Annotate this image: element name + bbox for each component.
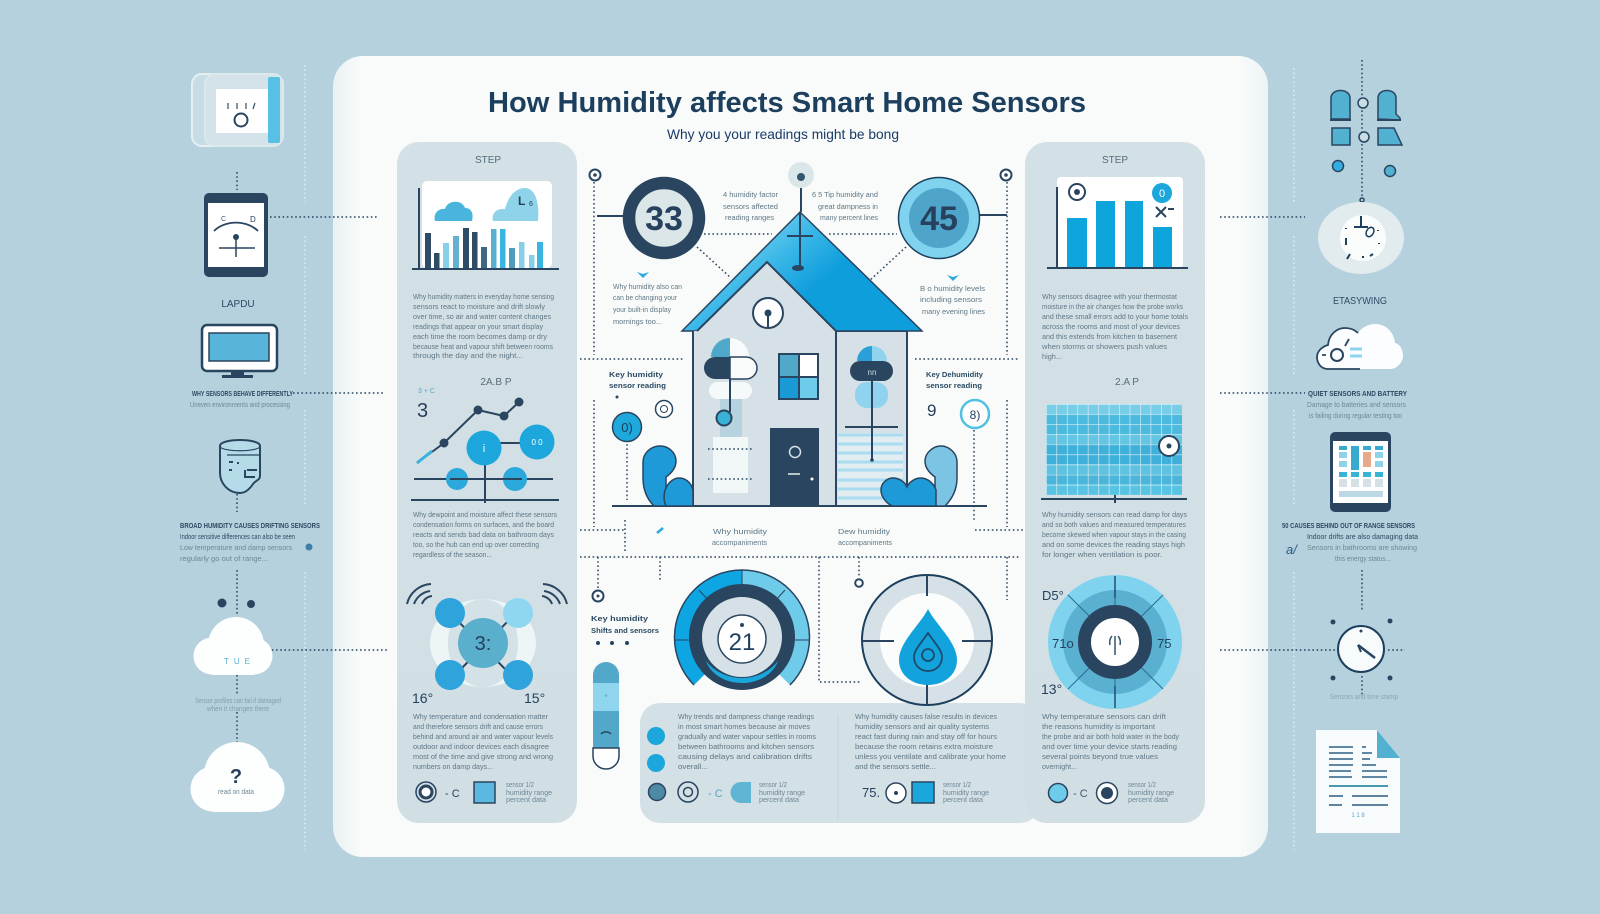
text: canister note: Indoor sensitive differences can also be seen <box>180 532 295 541</box>
right step heading: STEP <box>1102 155 1128 166</box>
legend left: humidity range <box>506 788 552 797</box>
paragraph right 3 <box>1042 712 1179 771</box>
paragraph right 2: and on some devices the reading stays high <box>1042 540 1185 549</box>
legend right: humidity range <box>1128 788 1174 797</box>
gauge: 33: 33 <box>645 200 683 238</box>
bar chart with clouds: 6 <box>529 201 533 208</box>
text: canister note <box>180 521 320 563</box>
icon: gauge tablet: C <box>221 216 226 223</box>
text: right cloud note: is failing during regular testing too <box>1309 411 1402 420</box>
text: canister note: BROAD HUMIDITY CAUSES DRIFTING SENSORS <box>180 521 320 530</box>
paragraph 1: because heat and vapour shift between rooms <box>413 342 553 351</box>
paragraph right 1: across the rooms and most of your devices <box>1042 322 1180 331</box>
paragraph 1: each time the room becomes damp or dry <box>413 332 547 341</box>
legend right: - C <box>1073 788 1088 800</box>
icon: cloud with readings: T U E <box>224 657 250 666</box>
paragraph right 2: and so both values and measured temperatures <box>1042 520 1186 529</box>
paragraph right 3: the reasons humidity is important <box>1042 722 1155 731</box>
roof cross <box>787 212 813 270</box>
door <box>770 428 819 506</box>
icon: cloud sensor <box>1317 324 1403 369</box>
text: tablet note <box>1282 521 1419 563</box>
paragraph right 3: the probe and air both hold water in the body <box>1042 732 1179 741</box>
text: tablet note: Indoor drifts are also damaging data <box>1307 532 1419 541</box>
paragraph 3: numbers on damp days... <box>413 762 493 771</box>
text: below house right: accompaniments <box>838 538 892 547</box>
icon: question cloud: read on data <box>218 787 255 796</box>
paragraph middle right: because the room retains extra moisture <box>855 742 993 751</box>
center connector dotted lines <box>580 182 1025 682</box>
sensor network diagram: 3: <box>475 633 491 655</box>
panel: bottom middle <box>640 703 1040 823</box>
text right of roof: many evening lines <box>922 307 985 316</box>
text near 33 <box>723 190 779 222</box>
line and node chart: 0 0 <box>531 438 543 447</box>
text left of roof: can be changing your <box>613 293 677 302</box>
left cloud sensor <box>704 338 757 493</box>
paragraph right 1: and this extends from kitchen to basement <box>1042 332 1177 341</box>
text right of roof: including sensors <box>920 295 982 304</box>
right cloud sensor: nn <box>868 368 876 377</box>
chart heading: 2A.B P <box>480 377 512 388</box>
temperature labels <box>412 690 545 706</box>
callout: right humidity note: 9 <box>927 401 936 420</box>
illustration: house <box>612 162 987 506</box>
floor line <box>612 505 987 507</box>
sidebar connector dotted lines <box>213 60 1405 760</box>
roof <box>682 212 922 331</box>
paragraph middle right: react fast during rain and stay off for hours <box>855 732 997 741</box>
paragraph middle right <box>855 712 1006 771</box>
text left of roof: Why humidity also can <box>613 282 682 291</box>
line and node chart: i <box>483 443 485 455</box>
callout: right humidity note: sensor reading <box>926 381 982 390</box>
paragraph right 2: Why humidity sensors can read damp for days <box>1042 510 1187 519</box>
legend right: sensor 1/2 <box>1128 780 1156 789</box>
radial gauge right <box>1041 575 1182 709</box>
paragraph right 1: Why sensors disagree with your thermostat <box>1042 292 1177 301</box>
paragraph right 3: Why temperature sensors can drift <box>1042 712 1166 721</box>
paragraph middle right: unless you ventilate and calibrate your home <box>855 752 1006 761</box>
legend right <box>1048 780 1174 804</box>
text: tablet note: Sensors in bathrooms are showing <box>1307 543 1417 552</box>
sensor network diagram <box>407 584 567 690</box>
icon: question cloud: ? <box>230 766 242 788</box>
paragraph 2: Why dewpoint and moisture affect these sensors <box>413 510 557 519</box>
gauge: 21: 21 <box>729 629 755 656</box>
legend dots: humidity range <box>759 788 805 797</box>
paragraph 2: reacts and sends bad data on bathroom days <box>413 530 554 539</box>
text near 45: many percent lines <box>820 213 878 222</box>
round attic window <box>753 298 783 328</box>
legend dots: sensor 1/2 <box>759 780 787 789</box>
text: below house right: Dew humidity <box>838 527 890 536</box>
callout: lower left note: Shifts and sensors <box>591 626 659 635</box>
paragraph 3: Why temperature and condensation matter <box>413 712 549 721</box>
thermometer <box>593 662 619 769</box>
paragraph 3: behind and around air and water vapour levels <box>413 732 553 741</box>
bar chart right <box>1047 177 1188 268</box>
legend left: percent data <box>506 795 547 804</box>
icon: document <box>1316 730 1400 833</box>
paragraph 2: condensation forms on surfaces, and the board <box>413 520 554 529</box>
right cloud sensor <box>838 346 903 505</box>
icon: round dial <box>1318 202 1404 274</box>
callout: lower left note <box>591 590 659 645</box>
icon: wifi signals <box>407 584 567 604</box>
paragraph middle left: overall... <box>678 762 708 771</box>
callout: left humidity note: 0) <box>621 420 633 435</box>
thermometer: * <box>604 693 608 702</box>
radial gauge right: 71o <box>1052 636 1074 651</box>
paragraph middle left: causing delays and calibration drifts <box>678 752 812 761</box>
icon: data tablet <box>1330 432 1391 512</box>
main card <box>333 56 1268 857</box>
paragraph middle left <box>678 712 816 771</box>
label: LAPDU: LAPDU <box>221 299 255 310</box>
text: cloud note: Sensor profiles can fail if damaged <box>195 696 281 705</box>
legend dots <box>647 727 805 804</box>
icon: monitor <box>202 325 277 378</box>
bar chart with clouds: L <box>518 194 525 208</box>
text right of roof <box>920 275 985 316</box>
gauge: 45 <box>898 178 980 258</box>
legend left: - C <box>445 788 460 800</box>
title: How Humidity affects Smart Home Sensors <box>488 87 1086 119</box>
paragraph middle right: Why humidity causes false results in devices <box>855 712 997 721</box>
text left of roof: mornings too... <box>613 317 662 326</box>
paragraph right 2 <box>1042 510 1187 559</box>
white divider dotted lines <box>305 65 1294 850</box>
text: right cloud note <box>1307 389 1407 420</box>
icon: gauge tablet: D <box>250 215 256 224</box>
paragraph 1: through the day and the night... <box>413 351 523 360</box>
bushes <box>643 446 957 506</box>
text: canister note: regularly go out of range... <box>180 554 268 563</box>
text: monitor note <box>190 389 293 409</box>
line and node chart: 3 + C <box>418 388 435 395</box>
legend middle <box>862 780 989 804</box>
legend middle: 75. <box>862 785 880 800</box>
paragraph 3: outdoor and indoor devices each disagree <box>413 742 549 751</box>
square window <box>779 354 818 399</box>
paragraph 3 <box>413 712 553 771</box>
text: below house left: Why humidity <box>713 527 767 536</box>
panel: left column <box>397 142 577 823</box>
paragraph right 3: several points beyond true values <box>1042 752 1158 761</box>
label: ETASYWING: ETASYWING <box>1333 296 1387 307</box>
paragraph middle right: and the sensors settle... <box>855 762 936 771</box>
callout: right humidity note: 8) <box>970 408 980 422</box>
heatmap <box>1041 404 1187 503</box>
icon: gauge tablet <box>204 193 268 277</box>
paragraph 1: sensors react to moisture and drift slowly <box>413 302 545 311</box>
text: tablet note: 50 CAUSES BEHIND OUT OF RANGE SENSORS <box>1282 521 1415 530</box>
icon: clock <box>1330 618 1398 701</box>
legend middle: humidity range <box>943 788 989 797</box>
text: monitor note: Uneven environments and processing <box>190 400 290 409</box>
house body <box>693 331 907 506</box>
paragraph right 3: and over time your device starts reading <box>1042 742 1177 751</box>
line and node chart <box>411 388 559 503</box>
panel: right column <box>1025 142 1205 823</box>
icon: right top sensors <box>1330 90 1402 202</box>
paragraph right 1: and these small errors add to your home totals <box>1042 312 1188 321</box>
radial gauge right: 13° <box>1041 681 1062 697</box>
text near 33: reading ranges <box>725 213 774 222</box>
text near 45 <box>812 190 878 222</box>
paragraph right 2: become skewed when vapour stays in the casing <box>1042 530 1186 539</box>
paragraph 1: over time, so air and water content changes <box>413 312 551 321</box>
legend dots: - C <box>708 788 723 800</box>
text: cloud note: when it changes there <box>206 704 269 713</box>
callout: right humidity note: Key Dehumidity <box>926 370 984 379</box>
temperature labels: 15° <box>524 690 545 706</box>
paragraph right 1: when storms or showers push values <box>1041 342 1167 351</box>
text near 45: great dampness in <box>818 202 878 211</box>
text: canister note: Low temperature and damp sensors <box>180 543 292 552</box>
icon: clock: Sensors and time stamp <box>1330 692 1398 701</box>
callout: lower left note: Key humidity <box>591 614 649 623</box>
paragraph 2 <box>413 510 557 559</box>
text near 33: sensors affected <box>723 202 778 211</box>
gable front <box>693 262 836 506</box>
text: right cloud note: Damage to batteries and sensors <box>1307 400 1406 409</box>
paragraph right 1: moisture in the air changes how the probe works <box>1042 302 1183 311</box>
left step heading: STEP <box>475 155 501 166</box>
text near 45: 6 5 Tip humidity and <box>812 190 878 199</box>
callout: left humidity note: Key humidity <box>609 370 664 379</box>
gauge: 45: 45 <box>920 200 958 238</box>
legend middle: percent data <box>943 795 984 804</box>
text left of roof: your built-in display <box>613 305 671 314</box>
icon: sensor card <box>192 74 283 146</box>
text: cloud note <box>195 696 281 713</box>
dots above cloud <box>218 598 255 608</box>
gauge: 21 <box>674 570 809 685</box>
text right of roof: B o humidity levels <box>920 284 985 293</box>
paragraph 3: and therefore sensors drift and cause errors <box>413 722 543 731</box>
paragraph right 3: overnight... <box>1042 762 1077 771</box>
text: below house left <box>657 527 767 547</box>
legend right: percent data <box>1128 795 1169 804</box>
text: right cloud note: QUIET SENSORS AND BATTERY <box>1308 389 1407 398</box>
paragraph right 2: for longer when ventilation is poor. <box>1042 550 1162 559</box>
bar chart with clouds <box>412 181 559 269</box>
paragraph 2: too, so the hub can end up over correcting <box>413 540 539 549</box>
paragraph 2: regardless of the season... <box>413 550 492 559</box>
legend left <box>416 780 552 804</box>
paragraph right 1 <box>1041 292 1188 361</box>
text: tablet note: this energy status... <box>1335 554 1391 563</box>
legend dots: percent data <box>759 795 800 804</box>
icon: question cloud <box>190 742 284 812</box>
text: tablet note: a/ <box>1286 542 1298 557</box>
temperature labels: 16° <box>412 690 433 706</box>
callout: small node markers <box>590 170 1012 587</box>
icon: cloud with readings <box>194 617 272 675</box>
paragraph 3: most of the time and give strong and wrong <box>413 752 553 761</box>
divider <box>837 715 839 820</box>
paragraph 1 <box>413 292 554 360</box>
paragraph middle right: humidity sensors and air quality systems <box>855 722 989 731</box>
paragraph right 1: high... <box>1042 352 1062 361</box>
paragraph middle left: gradually and water vapour settles in rooms <box>678 732 816 741</box>
callout: left humidity note: sensor reading <box>609 381 666 390</box>
subtitle: Why you your readings might be bong <box>667 126 899 142</box>
paragraph middle left: Why trends and dampness change readings <box>678 712 814 721</box>
text: below house right <box>838 527 892 547</box>
text: below house left: accompaniments <box>712 538 767 547</box>
paragraph middle left: in most smart homes because air moves <box>678 722 810 731</box>
text: monitor note: WHY SENSORS BEHAVE DIFFERENTLY <box>192 389 293 398</box>
text left of roof <box>613 272 682 326</box>
icon: document: 1 1 8 <box>1351 813 1365 819</box>
gauge: 33 <box>629 183 699 253</box>
radial gauge right: 75 <box>1157 636 1171 651</box>
callout: right humidity note <box>926 370 989 428</box>
legend left: sensor 1/2 <box>506 780 534 789</box>
line and node chart: 3 <box>417 400 428 422</box>
text near 33: 4 humidity factor <box>723 190 779 199</box>
legend middle: sensor 1/2 <box>943 780 971 789</box>
paragraph middle left: between bathrooms and kitchen sensors <box>678 742 814 751</box>
paragraph 1: Why humidity matters in everyday home sensing <box>413 292 554 301</box>
heatmap heading: 2.A P <box>1115 377 1139 388</box>
callout: left humidity note <box>609 370 672 442</box>
radial gauge right: D5° <box>1042 588 1064 603</box>
icon: sensor canister <box>220 440 260 493</box>
paragraph 1: readings that appear on your smart display <box>413 322 543 331</box>
bar chart right: 0 <box>1159 188 1165 200</box>
gauge: water drop <box>862 575 992 705</box>
antenna sensor <box>788 162 814 212</box>
